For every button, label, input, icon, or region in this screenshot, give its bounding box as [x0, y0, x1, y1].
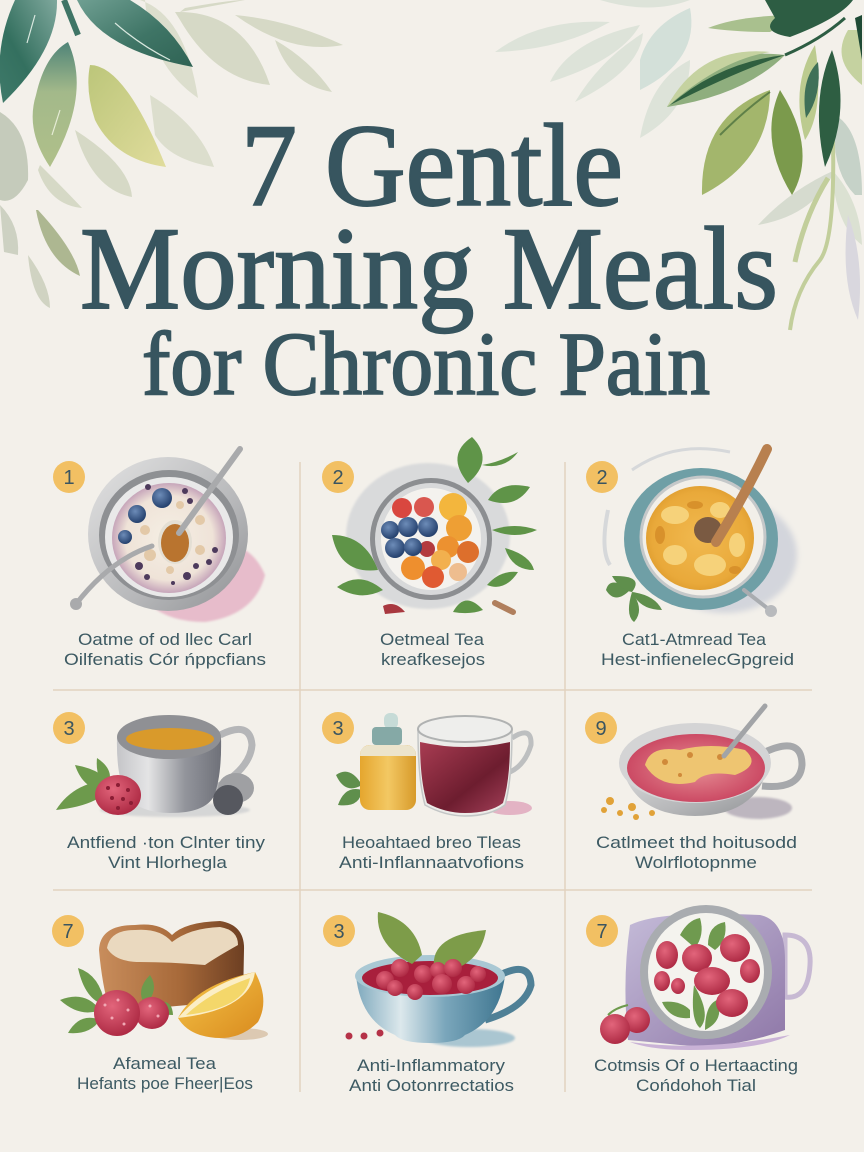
caption 4 — [67, 833, 266, 872]
caption 2: kreafkesejos — [381, 650, 485, 669]
caption 7: Afameal Tea — [113, 1054, 217, 1073]
badge 2: 2 — [332, 467, 344, 489]
caption 3: Cat1-Atmread Tea — [622, 630, 767, 649]
botanical corner: top right leaves — [495, 0, 862, 330]
caption 3: Hest-infienelecGpgreid — [601, 650, 794, 669]
caption 7: Hefants poe Fheer|Eos — [77, 1074, 253, 1093]
icon: berry soup bowl with spoon and handle — [601, 706, 802, 820]
caption 3 — [601, 630, 794, 669]
badge 7 — [52, 915, 84, 947]
badge 4 — [53, 712, 85, 744]
caption 2 — [380, 630, 485, 669]
caption 6 — [596, 833, 797, 872]
icon: golden porridge bowl with wooden spoon — [604, 449, 797, 622]
caption 2: Oetmeal Tea — [380, 630, 485, 649]
caption 4: Antfiend ·ton Clnter tiny — [67, 833, 266, 852]
icon: blue cup of berries with leaves — [346, 912, 531, 1047]
caption 8 — [349, 1056, 514, 1095]
caption 6: Wolrflotopnme — [635, 853, 757, 872]
badge 3: 2 — [596, 467, 608, 489]
caption 1: Oilfenatis Cór ńppcfians — [64, 650, 266, 669]
botanical corner: top left leaves — [0, 0, 343, 308]
badge 8: 3 — [333, 921, 345, 943]
title: Morning Meals — [80, 203, 778, 334]
badge 8 — [323, 915, 355, 947]
badge 7: 7 — [62, 921, 74, 943]
panel: meal 9 — [586, 905, 810, 1095]
badge 5: 3 — [332, 718, 344, 740]
badge 2 — [322, 461, 354, 493]
icon: honey bottle and glass of berry tea — [336, 713, 532, 816]
caption 9 — [594, 1056, 798, 1095]
caption 9: Cońdohoh Tial — [636, 1076, 756, 1095]
badge 4: 3 — [63, 718, 75, 740]
panel: meal 2 — [322, 437, 537, 669]
title: for Chronic Pain — [142, 315, 710, 414]
badge 3 — [586, 461, 618, 493]
badge 1: 1 — [63, 467, 75, 489]
title: 7 Gentle — [241, 100, 623, 231]
caption 8: Anti Ootonrrectatios — [349, 1076, 514, 1095]
caption 5: Heoahtaed breo Tleas — [342, 833, 521, 852]
icon: plate of strawberries on purple napkin — [600, 905, 810, 1050]
icon: toast, strawberries and lemon — [60, 921, 268, 1040]
panel: meal 8 — [323, 912, 531, 1095]
caption 5: Anti-Inflannaatvofions — [339, 853, 524, 872]
panel: meal 4 — [53, 712, 266, 872]
caption 8: Anti-Inflammatory — [357, 1056, 506, 1075]
icon: fruit bowl with leaves — [332, 437, 537, 614]
caption 5 — [339, 833, 524, 872]
caption 7 — [77, 1054, 253, 1093]
caption 1 — [64, 630, 266, 669]
caption 9: Cotmsis Of o Hertaacting — [594, 1056, 798, 1075]
caption 1: Oatme of od llec Carl — [78, 630, 252, 649]
badge 9 — [586, 915, 618, 947]
title — [80, 100, 778, 414]
panel: meal 5 — [322, 712, 532, 872]
panel: meal 1 — [53, 449, 266, 669]
badge 1 — [53, 461, 85, 493]
panel: meal 3 — [586, 449, 797, 669]
icon: mug with raspberry and stones — [56, 715, 254, 817]
panel: meal 6 — [585, 706, 802, 872]
panel: meal 7 — [52, 915, 268, 1093]
badge 6: 9 — [595, 718, 607, 740]
badge 5 — [322, 712, 354, 744]
grid dividers — [53, 462, 812, 1092]
badge 9: 7 — [596, 921, 608, 943]
badge 6 — [585, 712, 617, 744]
caption 6: Catlmeet thd hoitusodd — [596, 833, 797, 852]
icon: oatmeal bowl with blueberries — [70, 449, 265, 622]
caption 4: Vint Hlorhegla — [108, 853, 228, 872]
